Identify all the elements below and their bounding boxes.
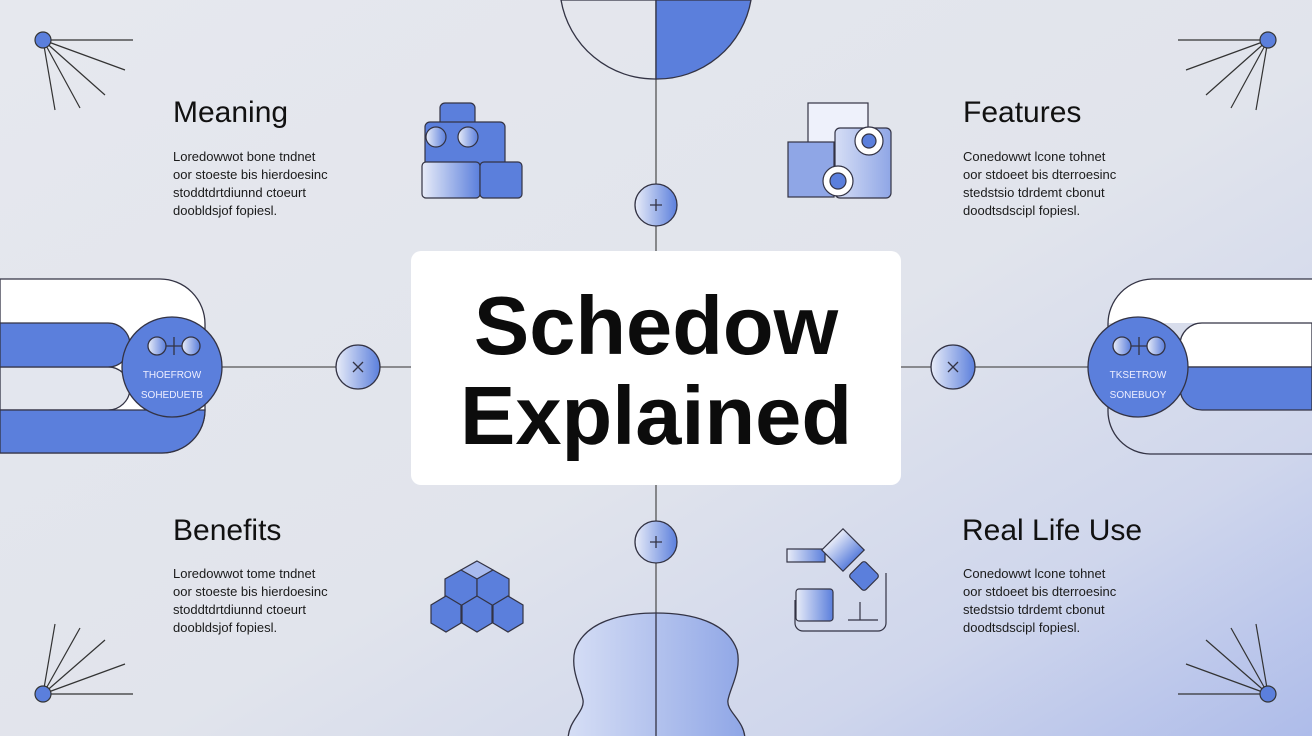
text: features: Conedowwt lcone tohnet [963, 149, 1105, 164]
text: meaning: oor stoeste bis hierdoesinc [173, 167, 328, 182]
icon: real life flow [787, 529, 886, 631]
plus nodes [635, 184, 677, 563]
text: benefits: doobldsjof fopiesl. [173, 620, 277, 635]
left pill label: SOHEDUETB [141, 390, 203, 401]
right pill label [1110, 370, 1166, 401]
center title card [411, 251, 901, 485]
left pill label: THOEFROW [143, 370, 201, 381]
icon: benefits hexagons [431, 561, 523, 632]
right pill [1088, 279, 1312, 454]
icon: meaning blocks [422, 103, 522, 198]
text: benefits: stoddtdrtdiunnd ctoeurt [173, 602, 306, 617]
heading: meaning: Meaning [173, 96, 288, 129]
text: meaning: Loredowwot bone tndnet [173, 149, 315, 164]
heading: real life use: Real Life Use [962, 514, 1142, 547]
text: benefits: oor stoeste bis hierdoesinc [173, 584, 328, 599]
right pill label: SONEBUOY [1110, 390, 1166, 401]
text: benefits [173, 566, 328, 635]
center title card: Explained [460, 369, 852, 462]
bottom blob [568, 613, 745, 736]
x nodes [336, 345, 975, 389]
text: real life use [963, 566, 1116, 635]
right pill label: TKSETROW [1110, 370, 1166, 381]
heading: benefits: Benefits [173, 514, 281, 547]
text: meaning: stoddtdrtdiunnd ctoeurt [173, 185, 306, 200]
text: real life use: doodtsdscipl fopiesl. [963, 620, 1080, 635]
icon: features docs [788, 103, 891, 198]
text: meaning: doobldsjof fopiesl. [173, 203, 277, 218]
center title card: Schedow [474, 279, 838, 372]
text: features: oor stdoeet bis dterroesinc [963, 167, 1116, 182]
text: features [963, 149, 1116, 218]
connector lines [222, 79, 1088, 736]
text: features: stedstsio tdrdemt cbonut [963, 185, 1105, 200]
text: real life use: stedstsio tdrdemt cbonut [963, 602, 1105, 617]
left pill [0, 279, 222, 453]
text: real life use: oor stdoeet bis dterroesinc [963, 584, 1116, 599]
top semicircle [561, 0, 751, 79]
heading: features: Features [963, 96, 1081, 129]
text: features: doodtsdscipl fopiesl. [963, 203, 1080, 218]
text: meaning [173, 149, 328, 218]
text: benefits: Loredowwot tome tndnet [173, 566, 315, 581]
text: real life use: Conedowwt lcone tohnet [963, 566, 1105, 581]
left pill label [141, 370, 203, 401]
